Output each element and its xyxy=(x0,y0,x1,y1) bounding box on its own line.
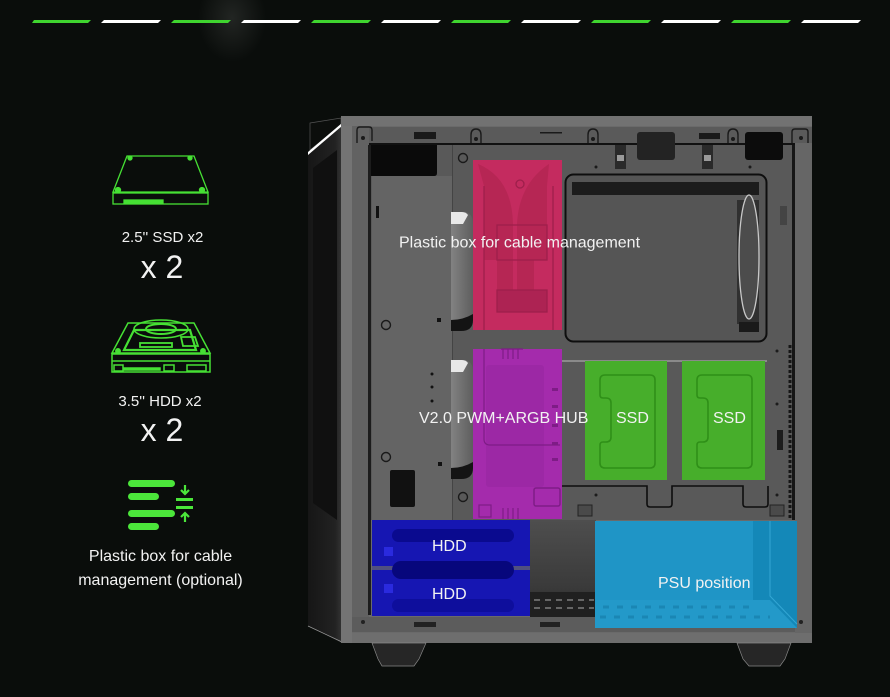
label: SSD count: 2.5'' SSD x2 xyxy=(122,229,203,246)
label: HDD count: x 2 xyxy=(141,412,183,448)
left foot xyxy=(372,643,426,666)
interior back panel xyxy=(369,143,795,520)
label: SSD count xyxy=(122,229,203,285)
right foot xyxy=(737,643,791,666)
panel: SSD bay 2 xyxy=(682,361,765,480)
callout labels: Plastic box for cable management xyxy=(399,234,641,252)
callout labels: V2.0 PWM+ARGB HUB xyxy=(419,410,588,427)
cable tube cutouts xyxy=(451,212,473,479)
lower tray outline xyxy=(562,486,768,507)
dashed header strip xyxy=(32,20,861,23)
icon: cable management xyxy=(128,480,193,530)
label: SSD count: x 2 xyxy=(141,249,183,285)
icon: 2.5 inch SSD xyxy=(113,156,208,204)
front panel xyxy=(308,118,342,643)
left tray holes xyxy=(376,206,442,507)
case diagram xyxy=(308,116,812,666)
label: cable management optional: management (optional) xyxy=(78,572,243,589)
panel: pink cable box xyxy=(473,160,562,330)
fan xyxy=(739,195,759,319)
label: cable management optional xyxy=(78,548,243,589)
callout labels: PSU position xyxy=(658,575,750,592)
callout labels: HDD xyxy=(432,586,467,603)
callout labels: SSD xyxy=(616,410,649,427)
lower chamber xyxy=(530,520,596,617)
left tray xyxy=(372,176,452,520)
panel: SSD bay 1 xyxy=(585,361,667,480)
cable window xyxy=(566,174,766,342)
right side tray marks xyxy=(578,206,790,520)
bottom bracket details xyxy=(361,620,803,627)
label: HDD count: 3.5'' HDD x2 xyxy=(118,393,202,410)
panel: purple hub xyxy=(473,349,562,519)
label: HDD count xyxy=(118,393,202,448)
panel: PSU position xyxy=(595,521,797,628)
top bracket details xyxy=(361,132,803,169)
label: cable management optional: Plastic box for cable xyxy=(89,548,232,565)
icon: 3.5 inch HDD xyxy=(112,320,210,372)
case frame xyxy=(341,116,812,643)
panel: HDD cage xyxy=(372,520,530,616)
callout labels: HDD xyxy=(432,538,467,555)
callout labels xyxy=(399,234,750,603)
callout labels: SSD xyxy=(713,410,746,427)
